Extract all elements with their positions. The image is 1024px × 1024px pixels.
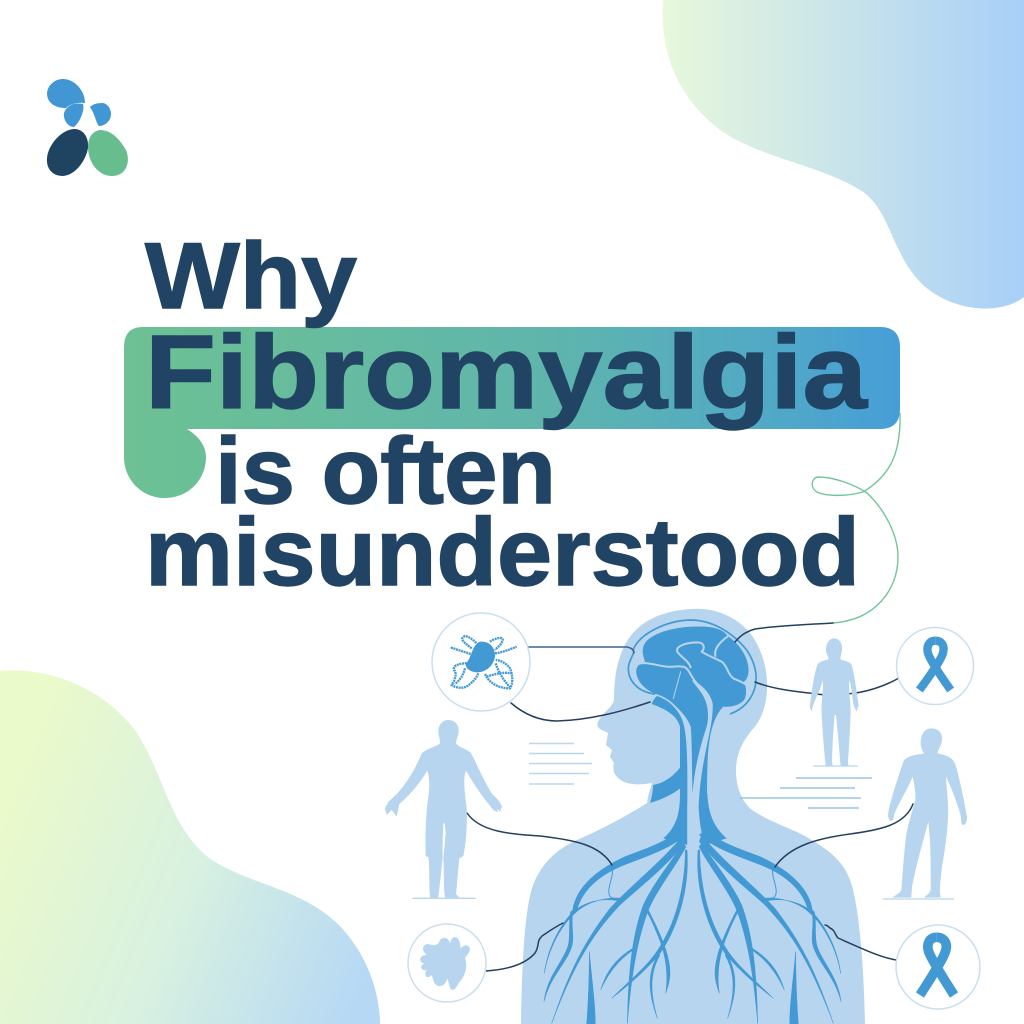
- text placeholder lines: left: [529, 744, 592, 784]
- circle: ribbon top right: [896, 628, 974, 704]
- nerve branches: left: [544, 830, 687, 1024]
- text placeholder lines: right: [740, 778, 872, 808]
- logo: [47, 79, 128, 176]
- brain: [628, 620, 756, 803]
- title: misunderstood: [145, 499, 860, 606]
- circle: microbe icon: [432, 613, 530, 711]
- nerve branches: right: [698, 830, 841, 1024]
- title: [145, 223, 868, 606]
- connector lines: [467, 623, 913, 971]
- title: Why: [145, 223, 357, 328]
- circle: ribbon bottom right: [896, 925, 980, 1009]
- head and torso silhouette: [521, 609, 865, 1024]
- background blob: top right: [663, 0, 1024, 309]
- title highlight bar: [124, 327, 900, 498]
- brain stem and spinal channel: [663, 680, 727, 852]
- neck wedge: [650, 765, 682, 803]
- person figure: left: [385, 720, 502, 898]
- circle: cell icon bottom left: [408, 924, 486, 1002]
- title: is often: [215, 418, 556, 523]
- person figure: centre right: [810, 638, 859, 766]
- background blob: bottom left: [0, 670, 380, 1024]
- title: Fibromyalgia: [145, 315, 868, 431]
- person figure: far right: [883, 728, 967, 899]
- green connector thread: [812, 413, 900, 623]
